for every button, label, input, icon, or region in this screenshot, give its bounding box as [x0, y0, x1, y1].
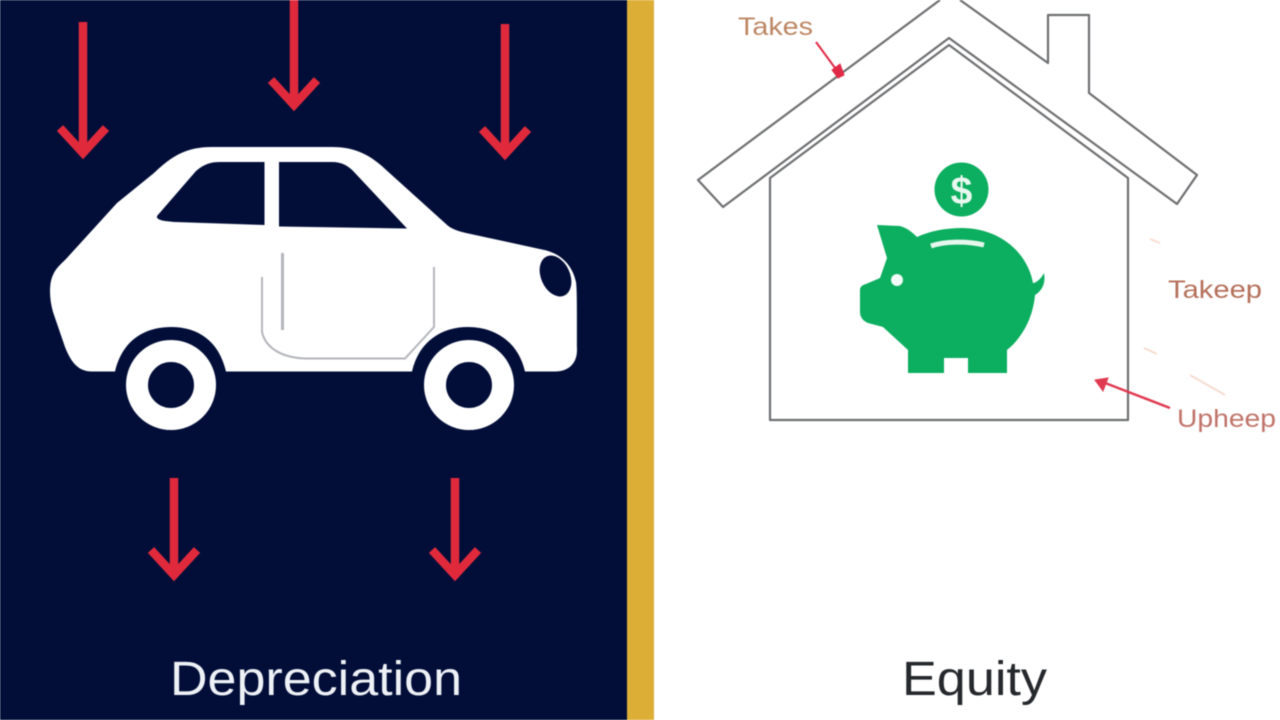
- heading: equity: Equity: [902, 653, 1047, 706]
- pig coin slot: [931, 242, 984, 246]
- label: takes: Takes: [738, 13, 813, 41]
- car front window: [279, 162, 407, 228]
- icon: piggy bank: [860, 225, 1045, 373]
- divider: gold bar: [627, 0, 654, 720]
- heading: depreciation: Depreciation: [170, 653, 462, 706]
- arrow: bottom left down: [151, 478, 197, 575]
- arrow: top left down: [60, 22, 106, 153]
- arrow: top centre down: [271, 0, 317, 105]
- icon: car: [50, 147, 577, 419]
- pig eye: [891, 274, 903, 286]
- arrow: upheep to wall: [1095, 378, 1170, 408]
- arrow: top right down: [482, 24, 528, 154]
- car rear window: [157, 162, 264, 225]
- car headlight: [534, 250, 577, 302]
- panel: depreciation: [0, 0, 627, 720]
- label: takeep: Takeep: [1168, 276, 1262, 304]
- car front wheel: [435, 351, 503, 419]
- icon: dollar coin: [934, 162, 988, 216]
- car rear wheel: [137, 351, 205, 419]
- icon: house outline: [698, 0, 1197, 420]
- arrow: bottom right down: [432, 478, 478, 575]
- car door outline: [262, 253, 434, 358]
- faint marks: [1144, 239, 1225, 395]
- panel: equity: [698, 0, 1276, 706]
- label: upheep: Upheep: [1177, 405, 1276, 433]
- icon: dollar coin: $: [951, 170, 973, 213]
- arrow: takes to roof: [816, 42, 844, 78]
